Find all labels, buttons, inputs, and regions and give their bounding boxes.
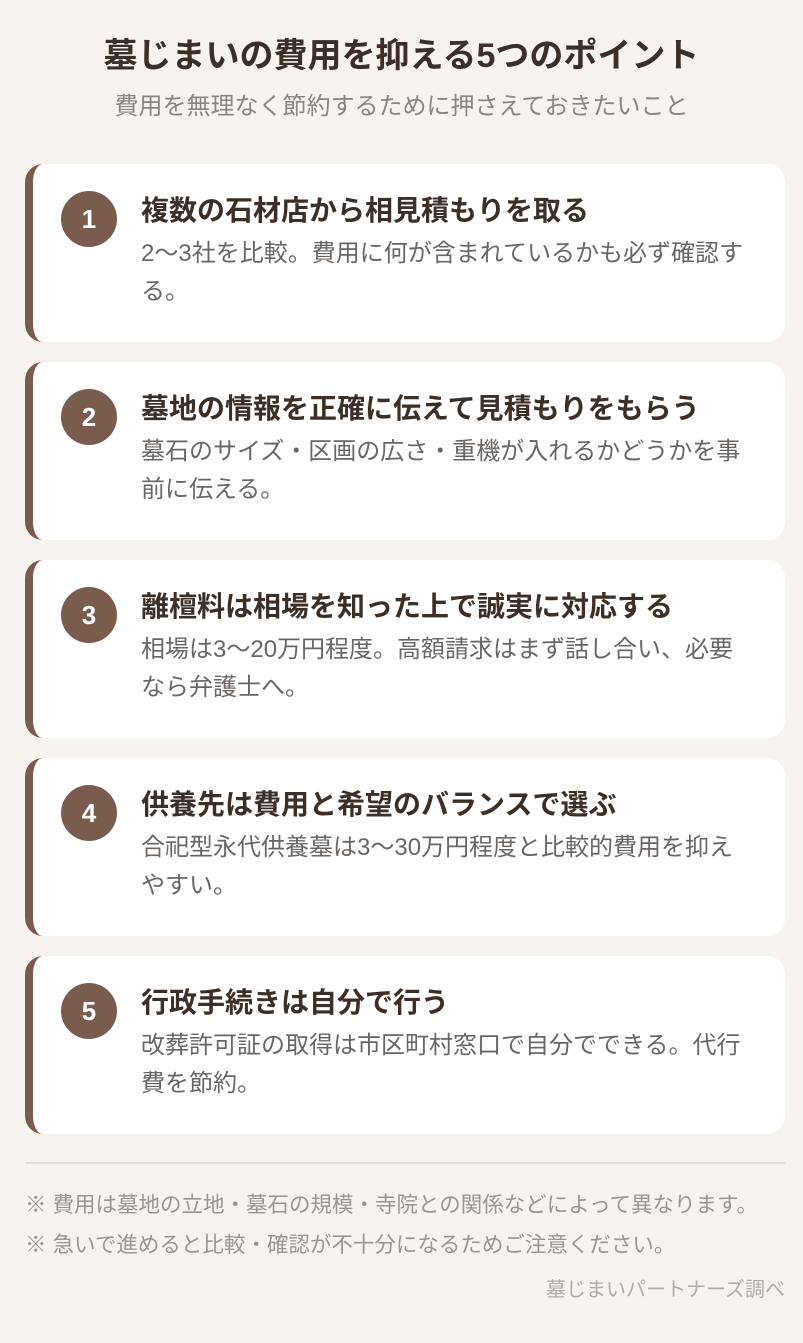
text: point 3: 相場は3～20万円程度。高額請求はまず話し合い、必要なら弁護士へ。 xyxy=(141,636,733,701)
heading: point 2: 墓地の情報を正確に伝えて見積もりをもらう xyxy=(141,393,700,424)
icon: number 5 xyxy=(61,983,117,1039)
icon: number 5: 5 xyxy=(82,996,96,1026)
icon: number 1: 1 xyxy=(82,204,96,234)
icon: number 3 xyxy=(61,587,117,643)
subtitle: 費用を無理なく節約するために押さえておきたいこと xyxy=(114,93,689,120)
text: point 1: 2～3社を比較。費用に何が含まれているかも必ず確認する。 xyxy=(141,240,743,305)
icon: number 3: 3 xyxy=(82,600,96,630)
notes xyxy=(25,1193,758,1257)
text: point 4: 合祀型永代供養墓は3～30万円程度と比較的費用を抑えやすい。 xyxy=(141,834,733,899)
icon: number 2: 2 xyxy=(82,402,96,432)
panel: point 4 xyxy=(25,758,785,936)
icon: number 4: 4 xyxy=(82,798,96,828)
panel: point 5 xyxy=(25,956,785,1134)
text: point 5: 改葬許可証の取得は市区町村窓口で自分でできる。代行費を節約。 xyxy=(141,1032,741,1097)
notes: ※ 費用は墓地の立地・墓石の規模・寺院との関係などによって異なります。 xyxy=(25,1193,758,1217)
heading: point 4: 供養先は費用と希望のバランスで選ぶ xyxy=(141,789,616,820)
heading: point 5: 行政手続きは自分で行う xyxy=(141,987,449,1018)
icon: number 1 xyxy=(61,191,117,247)
panel: point 3 xyxy=(25,560,785,738)
icon: number 4 xyxy=(61,785,117,841)
source: 墓じまいパートナーズ調べ xyxy=(546,1279,785,1301)
icon: number 2 xyxy=(61,389,117,445)
heading: point 3: 離檀料は相場を知った上で誠実に対応する xyxy=(141,591,673,622)
text: point 2: 墓石のサイズ・区画の広さ・重機が入れるかどうかを事前に伝える。 xyxy=(141,438,740,503)
heading: point 1: 複数の石材店から相見積もりを取る xyxy=(141,195,589,226)
notes: ※ 急いで進めると比較・確認が不十分になるためご注意ください。 xyxy=(25,1233,675,1257)
panel: point 2 xyxy=(25,362,785,540)
title: 墓じまいの費用を抑える5つのポイント xyxy=(104,37,699,75)
panel: point 1 xyxy=(25,164,785,342)
